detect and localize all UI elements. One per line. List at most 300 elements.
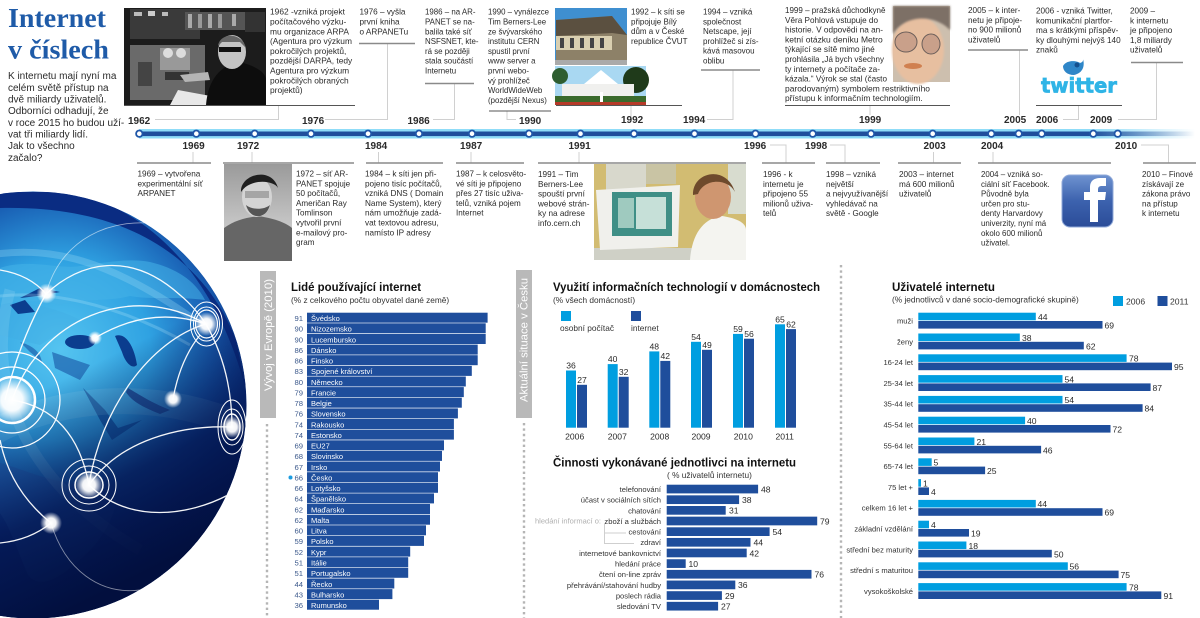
chart heading: users: Uživatelé internetu [892,280,995,294]
timeline text: 1972: 1972 – síť AR- [296,170,348,178]
timeline text: 2010: 2010 – Finové [1142,170,1194,179]
timeline text: 1999 [785,6,931,103]
chart heading: households: Využití informačních technologií v domácnostech [553,280,820,294]
chart heading: Europe: Lidé používající internet [291,280,421,294]
bar chart: Europe: Estonsko [311,431,342,440]
bar chart: users: 72 [1112,424,1122,434]
timeline text: 1984: 1984 – k síti jen při- [365,170,437,178]
bar chart: Europe: 78 [294,399,303,408]
bar chart: users: 21 [976,437,986,447]
timeline text: 1962: počítačového výzku- [270,16,347,26]
bar chart: Europe: Finsko [311,356,333,366]
bar chart: households: 2009 [691,432,711,442]
bar chart: users: 4 [931,487,936,497]
timeline text: 1962: projektů) [270,85,303,95]
bar chart: households: 2007 [608,432,627,442]
timeline text: 1987: vé síti je připojeno [456,179,522,188]
bar chart: Europe: 60 [294,527,303,536]
timeline text: 1996: milionů uživa- [763,198,813,208]
bar chart: Europe: Itálie [311,558,327,568]
bar chart: Europe: Švédsko [311,314,340,323]
timeline year labels: 1969 [182,141,205,152]
intro text: Jak to všechno [8,141,75,152]
bar chart: households: 65 [775,314,785,324]
bar chart: Europe: Česko [311,474,332,482]
timeline text: 1998: největší [826,180,855,189]
chart heading: households: (% všech domácností) [553,295,635,305]
timeline text: 1986: PANET se na- [425,18,475,26]
timeline text: 2005: no 900 milionů [968,25,1022,35]
timeline text: 2010: k internetu [1142,209,1180,218]
bar chart: users: 91 [1164,591,1173,601]
timeline text: 1992: republice ČVUT [631,37,688,46]
bar chart: activities: 10 [688,559,698,569]
icon: twitter logo: twitter [1041,74,1117,98]
timeline text: 2010: zákona právo [1142,190,1191,199]
timeline text: 2003 [899,170,955,199]
bar chart: activities: hledání informací o: [535,517,601,526]
legend: users: 2006 [1126,296,1145,306]
bar chart: Europe: 51 [294,558,303,568]
photo: Tim Berners-Lee [594,164,746,260]
timeline text: 1990: vý prohlížeč [488,76,530,85]
bar chart: Europe: 91 [294,314,303,323]
bar chart: activities: 44 [754,538,763,548]
chart heading: households [553,280,820,305]
bar chart: households: 56 [744,329,754,339]
timeline text: 2006: komunikační plartfor- [1036,16,1113,25]
bar chart: Europe: 90 [294,325,303,334]
bar chart: activities: telefonování [620,485,662,494]
bar chart: Europe: 68 [294,452,303,461]
timeline text: 2004: ciální síť Facebook. [981,180,1050,189]
bar chart: users: 56 [1070,562,1079,572]
side tab: Europe [260,271,276,418]
icon: facebook logo [1062,175,1113,227]
timeline text: 1994: společnost [703,17,742,26]
bar chart: Europe: Lucembursko [311,335,356,344]
timeline text: 1984: Name System), který [365,199,442,208]
chart heading: activities: ( % uživatelů internetu) [667,470,752,480]
bar chart: Europe: 80 [294,378,303,387]
bar chart: Europe: Řecko [311,580,332,589]
bar chart: users: střední s maturitou [850,566,913,575]
bar chart: users: 75 let + [888,483,914,492]
bar chart: Europe: Slovensko [311,410,346,419]
timeline text: 1972 [296,170,351,247]
timeline text: 1999: týkající se sítě mimo jiné [785,45,875,54]
legend: households: internet [631,323,659,333]
timeline text: 1990: (pozdější Nexus) [488,96,547,105]
timeline text: 2006 [1036,6,1121,55]
bar chart: Europe: Německo [311,378,343,387]
chart heading: activities: Činnosti vykonávané jednotlivci na internetu [553,455,796,470]
bar chart: households: 2011 [775,432,794,442]
timeline year labels: 2009 [1090,115,1113,126]
timeline text: 1999: historie. V odpovědi na an- [785,26,883,35]
timeline text: 1996: internetu je [763,180,804,189]
timeline year labels: 1986 [408,116,430,127]
bar chart: users: 84 [1144,404,1154,414]
timeline text: 2006: 2006 - vzniká Twitter, [1036,6,1113,16]
bar chart: Europe: 62 [294,516,303,525]
photo: Ray Tomlinson [224,164,292,261]
timeline text: 2003: má 600 milionů [899,179,955,189]
bar chart: activities: 29 [725,591,735,601]
bar chart: Europe: 43 [294,590,303,599]
timeline text: 2009: 2009 – [1130,6,1155,16]
timeline text: 2009 [1129,6,1173,55]
timeline text: 1999: ty internety a počítače za- [785,65,880,74]
bar chart: Europe: 51 [294,569,303,578]
timeline text: 1984: namísto IP adresy [365,228,432,237]
timeline text: 1972: Tomlinson [296,209,332,218]
bar chart: Europe: 90 [294,335,303,344]
timeline text: 1996: připojeno 55 [763,190,809,199]
timeline text: 1996: telů [763,208,777,218]
bar chart: households: 62 [786,320,796,330]
bar chart: Europe: Dánsko [311,346,336,355]
bar chart: activities: přehrávání/stahování hudby [567,581,661,590]
timeline text: 1999: ketní otázku deníku Metro [785,35,883,44]
timeline text: 1990: první webo- [488,66,529,76]
timeline text: 1998: vyhledávač na [826,199,878,208]
bar chart: users: 87 [1152,383,1162,393]
bar chart: activities: účast v sociálních sítích [581,496,661,505]
timeline text: 1998: a nejvyužívanější [826,190,889,199]
bar chart: users: vysokoškolské [864,587,913,596]
timeline text: 2004: okolo 600 milionů [981,229,1042,238]
title: v číslech [8,34,109,64]
bar chart: Europe: 83 [294,367,303,376]
timeline text: 1984: nám umožňuje zadá- [365,209,442,218]
timeline text: 1969: 1969 – vytvořena [138,170,201,178]
photo: 1962 computer operator [124,8,266,105]
timeline text: 2004: 2004 – vzniká so- [981,170,1043,179]
photo: White House [552,66,649,105]
bar chart: households: 2010 [734,432,753,442]
bar chart: households: 48 [650,342,659,352]
bar chart: Europe: 86 [294,346,303,355]
timeline text: 1976 [360,8,409,36]
bar chart: users: 25 [987,466,997,476]
timeline year labels [128,115,1138,152]
bar chart: Europe [288,313,488,610]
timeline text: 1986: stala součástí [425,57,474,66]
timeline text: 1990: 1990 – vynálezce [488,8,550,17]
timeline text: 1984: vat textovou adresu, [365,218,439,228]
bar chart: users: ženy [897,337,913,346]
timeline text: 1972: gram [296,238,315,247]
timeline year labels: 1987 [460,141,483,152]
timeline text: 1992 [631,8,688,46]
timeline year labels: 1990 [519,116,542,127]
chart heading: Europe: (% z celkového počtu obyvatel dané země) [291,295,449,305]
chart heading: users [892,280,1079,305]
timeline text: 1999: Věra Pohlová vstupuje do [785,16,878,25]
bar chart: Europe: Španělsko [311,495,346,504]
bar chart: households: 40 [608,354,618,364]
bar chart: users: 69 [1104,508,1114,518]
bar chart: users: střední bez maturity [846,545,913,554]
bar chart: activities: 79 [820,516,830,526]
bar chart: Europe: Nizozemsko [311,325,352,334]
timeline text: 1999: kázala.“ Výrok se stal (často [785,75,887,84]
intro text: vat tři miliardy lidí. [8,130,88,140]
bar chart: users: celkem 16 let + [862,504,914,513]
legend: users: 2011 [1170,296,1189,306]
timeline text: 2010: získávají ze [1142,180,1185,189]
timeline text: 1962: pozdější DARPA, tedy [270,56,353,66]
bar chart: Europe: Slovinsko [311,452,343,461]
bar chart: activities [535,484,830,612]
bar chart: users: 1 [923,478,928,488]
timeline text: 1998 [826,170,889,218]
timeline text: 1991: spouští první [538,190,586,199]
timeline text: 1987: 1987 – k celosvěto- [456,170,526,178]
timeline text: 1969: ARPANET [138,189,176,198]
timeline text: 1998: 1998 – vzniká [826,170,876,179]
bar chart: Europe: 62 [294,505,303,514]
bar chart: Europe: 66 [294,484,303,493]
bar chart: users: 45-54 let [883,420,914,430]
bar chart: activities: hledání práce [615,560,661,568]
bar chart: households: 54 [691,332,701,342]
legend: users [1113,296,1189,306]
intro text: začalo? [8,153,43,164]
bar chart: Europe: 69 [294,442,303,451]
bar chart: activities: poslech rádia [616,592,662,600]
legend: households [560,311,659,333]
intro text: K internetu mají nyní ma [8,71,117,82]
timeline text: 2005: 2005 – k inter- [968,6,1021,15]
bar chart: users: 16-24 let [883,358,914,367]
bar chart: Europe: Spojené království [311,367,373,376]
timeline year labels: 2003 [924,141,946,152]
title [8,2,109,64]
bar chart: users: 50 [1054,549,1064,559]
timeline text: 2009: 1,8 miliardy [1130,36,1173,45]
timeline year labels: 2005 [1004,115,1027,126]
timeline text: 1976: o ARPANETu [360,27,409,36]
bar chart: activities: zboží a službách [604,517,661,526]
bar chart: households: 27 [577,375,587,385]
timeline text: 1984: pojeno tisíc počítačů, [365,178,442,188]
timeline text: 1994: kává masovou [703,47,755,56]
timeline text: 1986: Internetu [425,66,456,76]
bar chart: Europe: Portugalsko [311,569,351,578]
bar chart: Europe: 44 [294,580,304,589]
timeline year labels: 1999 [859,115,882,126]
timeline text: 1991: 1991 – Tim [538,170,579,179]
timeline text: 1994: oblibu [703,56,724,66]
bar chart: users: 19 [971,528,981,538]
timeline year labels: 2006 [1036,115,1059,126]
timeline text: 1986: 1986 – na AR- [425,8,476,17]
timeline text: 1986 [425,8,479,76]
timeline text: 2004 [981,170,1050,248]
timeline year labels: 1992 [621,115,644,126]
timeline text: 1972: e-mailový pro- [296,228,348,237]
bar chart: activities: 36 [738,580,748,590]
intro text: v roce 2015 ho budou uží- [8,118,124,129]
bar chart: activities: čtení on-line zpráv [599,570,661,579]
bar chart: Europe: Kypr [311,548,327,557]
bar chart: Europe: 52 [294,548,303,557]
bar chart: Europe: 36 [294,601,303,610]
timeline text: 1992: dům a v České [631,27,685,36]
timeline year labels: 1962 [128,116,151,127]
bar chart: users: 55-64 let [883,441,914,450]
timeline text: 1976: první kniha [360,18,400,26]
timeline text: 1986: rá se později [425,47,470,56]
bar chart: users: 62 [1086,341,1096,351]
timeline text: 1991: Berners-Lee [538,180,584,189]
timeline text: 1991: info.cern.ch [538,219,581,228]
timeline text: 1962: pokročilých obraných [270,75,349,85]
timeline text: 2003: 2003 – internet [899,170,954,179]
timeline text: 2005 [968,6,1022,44]
bar chart: households: 49 [702,340,712,350]
dotted separators [267,265,841,618]
timeline text: 1962: pokročilých projektů, [270,46,346,56]
bar chart: Europe: 67 [294,463,303,472]
bar chart: users: 78 [1129,354,1139,364]
bar chart: Europe: Belgie [311,399,332,408]
timeline text: 1984 [365,170,444,237]
bar chart: activities: 48 [761,484,771,494]
bar chart: Europe: Irsko [311,463,327,472]
timeline text: 1962: Agentura pro výzkum [270,66,349,76]
timeline text: 1999: 1999 – pražská důchodkyně [785,6,886,15]
timeline text: 2009: uživatelů [1130,45,1163,55]
timeline text: 1987: telů, vzniká pojem [456,199,521,208]
timeline text: 2005: uživatelů [968,34,1001,44]
timeline text: 2004: univerzity, nyní má [981,219,1047,228]
legend: households: osobní počítač [560,323,614,333]
timeline text: 2006: ky dlouhými nejvýš 140 [1036,36,1121,45]
timeline year labels: 1991 [568,141,591,152]
timeline connectors [124,44,1196,163]
timeline text: 1996 [763,170,813,218]
bar chart: users: muži [897,316,913,326]
bar chart: Europe: EU27 [311,442,330,451]
intro text: dvě miliardy uživatelů. [8,94,106,106]
timeline text: 2004: uživatel. [981,239,1010,248]
timeline text: 1990: Tim Berners-Lee [488,18,547,26]
bar chart: Europe: 74 [294,431,304,440]
timeline text: 1987: přes 27 tisíc uživa- [456,189,524,198]
bar chart: users: 35-44 let [883,400,914,409]
timeline text: 1992: připojuje Bílý [631,17,677,26]
timeline text: 1998: světě - Google [826,209,879,218]
timeline text: 1986: balila také síť [425,27,473,36]
timeline text: 1994: prohlížeč si zís- [703,37,759,46]
chart heading: Europe [291,280,449,305]
timeline text: 1991 [537,170,590,228]
timeline text: 2010 [1142,170,1194,218]
timeline text: 1962 [270,7,353,95]
bar chart: Europe: Lotyšsko [311,484,341,493]
timeline text: 1990: ze švývarského [488,27,543,36]
title: Internet [8,2,107,33]
bar chart: users: 54 [1064,395,1074,405]
timeline axis [136,129,1195,138]
bar chart: Europe: Litva [311,527,328,536]
bar chart: households: 32 [619,367,629,377]
bar chart: households: 59 [733,324,743,334]
timeline text: 1976: 1976 – vyšla [360,8,406,17]
timeline text: 1990 [487,8,550,105]
bar chart: activities: sledování TV [617,602,662,611]
intro text: Odborníci odhadují, že [8,106,109,117]
bar chart: Europe: 66 [294,474,303,482]
timeline year labels: 1984 [365,141,388,152]
bar chart: users: základní vzdělání [854,524,914,534]
timeline year labels: 1976 [302,116,325,127]
side tab: Czech: Aktuální situace v Česku [518,278,530,402]
chart heading: activities [553,455,796,480]
bar chart: Europe: Maďarsko [311,505,344,514]
timeline text: 2004: určen pro stu- [981,199,1030,208]
timeline text: 1990: institutu CERN [488,37,540,46]
intro text [8,71,124,164]
bar chart: households: 2008 [650,432,669,442]
timeline text: 1994: 1994 – vzniká [703,8,753,16]
timeline year labels: 2004 [981,141,1004,152]
bar chart: users: 78 [1129,582,1139,592]
timeline text: 1999: přístupu k informačním technologiím. [785,94,923,103]
bar chart: Europe: Rakousko [311,420,344,429]
bar chart: users: 46 [1043,445,1053,455]
bar chart: Europe: 86 [294,356,303,366]
timeline text: 1962: mu organizace ARPA [270,26,349,36]
timeline text: 1999: parodovaným) symbolem restriktivního [785,84,931,93]
bar chart: users: 44 [1038,312,1048,322]
bar chart: Europe: Bulharsko [311,590,344,599]
bar chart: users: 5 [934,458,938,468]
timeline text: 1991: webové strán- [537,199,590,208]
timeline text: 1969 [138,170,204,198]
bar chart: activities: 54 [772,527,782,537]
timeline year labels: 1994 [683,115,706,126]
bar chart: users: 44 [1038,499,1047,509]
illustration: globe with network [0,192,250,618]
timeline text: 1986: NSFSNET, kte- [425,37,479,46]
bar chart: users: 4 [931,520,936,530]
bar chart: activities: chatování [628,506,662,515]
timeline text: 1972: PANET spojuje [296,179,351,188]
photo: Vera Pohlova [892,6,950,84]
side tab: Czech [516,270,532,418]
bar chart: activities: cestování [628,528,662,537]
timeline text: 1972: Američan Ray [296,199,348,208]
bar chart: activities: internetové bankovnictví [579,549,662,558]
timeline text: 1994 [703,8,759,66]
bar chart: users: 54 [1064,374,1074,384]
bar chart: Europe: 59 [294,537,303,546]
timeline text: 2006: znaků [1036,45,1058,55]
timeline text: 2009: je připojeno [1129,26,1173,35]
bar chart: Europe: 74 [294,420,304,429]
timeline text: 1994: Netscape, její [703,27,752,36]
bar chart: users [846,312,1184,601]
timeline text: 2010: na přístup [1142,199,1178,208]
timeline year labels: 1998 [805,141,828,152]
timeline text: 2004: Původně byla [981,190,1029,199]
bar chart: users: 65-74 let [883,462,914,471]
bar chart: households: 36 [566,360,576,370]
